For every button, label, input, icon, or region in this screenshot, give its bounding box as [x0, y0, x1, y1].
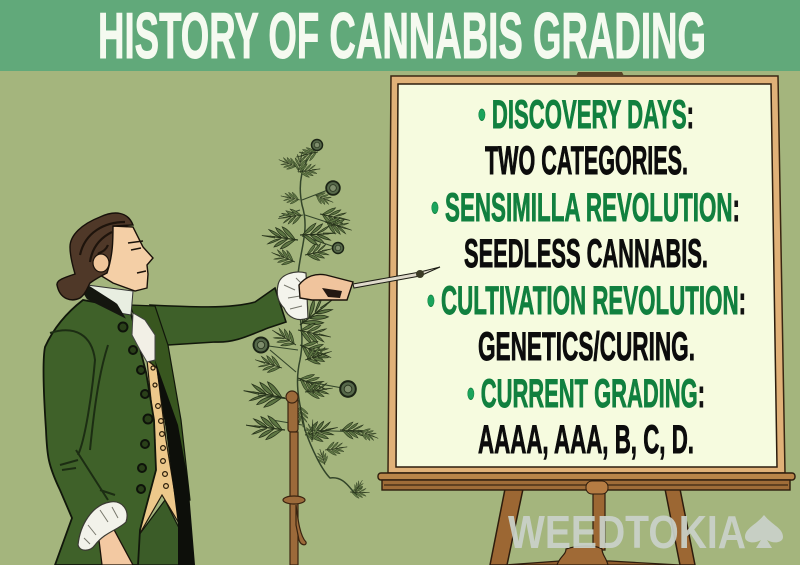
brass stand [283, 391, 306, 565]
pointing hand [299, 274, 353, 300]
black collar [83, 287, 122, 315]
waistcoat buttons [151, 366, 168, 488]
coat body [43, 300, 156, 565]
eye and mouth [128, 241, 146, 273]
board text [427, 93, 746, 462]
easel legs and base [490, 489, 695, 565]
cannabis plant illustration [242, 139, 380, 498]
left cuff and hand [98, 526, 133, 565]
hair [57, 213, 133, 300]
shirt ruffle [132, 313, 155, 362]
ear [93, 254, 109, 272]
easel ledge [378, 473, 795, 494]
lapel [130, 305, 190, 500]
right cuff [277, 272, 308, 320]
header band [0, 0, 800, 71]
board panel [396, 84, 777, 467]
hair strands [80, 222, 125, 262]
watermark: WEEDTOKIA [508, 506, 746, 558]
pointer stick [353, 267, 440, 288]
coat fold shadows [50, 330, 115, 500]
teacher figure [43, 213, 440, 565]
coat front lining [155, 360, 195, 565]
board top clip [576, 72, 624, 76]
right cuff ruffles [284, 278, 302, 309]
legs [138, 500, 180, 565]
left cuff ruffles [84, 507, 118, 544]
pointing arm [150, 288, 286, 345]
waistcoat [139, 360, 180, 535]
easel board frame [388, 76, 785, 473]
icon: spade [745, 515, 783, 548]
face [100, 226, 153, 291]
coat buttons [118, 322, 152, 493]
cravat [87, 285, 133, 315]
